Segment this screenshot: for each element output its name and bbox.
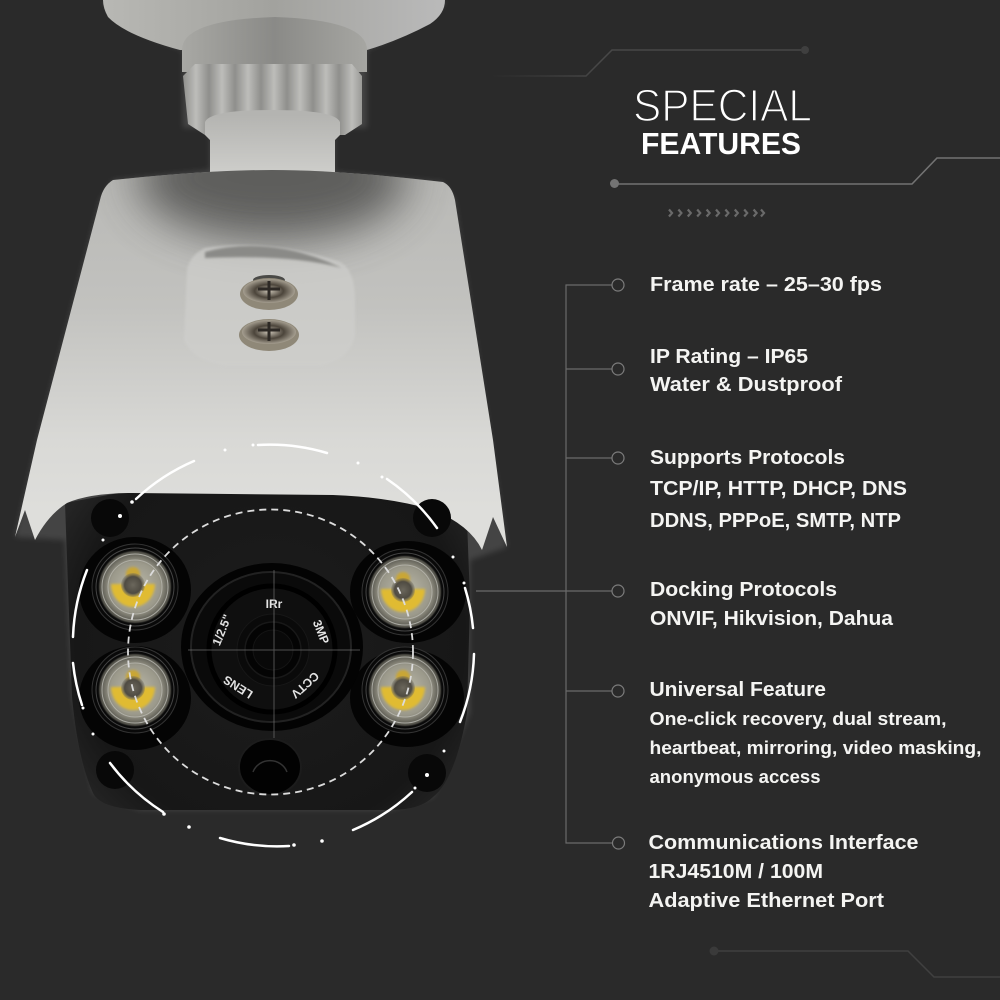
- LED recesses: [79, 537, 466, 750]
- feature: communications: Communications Interface: [648, 832, 918, 854]
- screw recess: [184, 245, 355, 366]
- feature: frame rate: Frame rate – 25–30 fps: [650, 274, 882, 296]
- feature: IP rating: Water & Dustproof: [650, 374, 842, 396]
- corner screw holes: [91, 499, 451, 792]
- feature: docking protocols: Docking Protocols: [650, 579, 837, 601]
- dashed inner ring: [128, 510, 413, 794]
- ceiling mount disc: [103, 0, 445, 50]
- feature: universal: Universal Feature: [650, 679, 826, 701]
- lens markings: [209, 597, 332, 701]
- feature node circles: [612, 279, 624, 849]
- lens markings: CCTV: [288, 669, 322, 701]
- glow around camera: [15, 0, 507, 810]
- bottom sensor hole: [239, 739, 301, 795]
- feature: communications: Adaptive Ethernet Port: [648, 890, 884, 912]
- circuit line: bottom: [710, 946, 1000, 977]
- mounting screws: [239, 275, 299, 351]
- LED lamps: [92, 544, 448, 733]
- camera illustration: [15, 0, 507, 810]
- feature: supports protocols: Supports Protocols: [650, 447, 845, 469]
- circuit line: under title: [610, 158, 1000, 188]
- mount collar: [182, 17, 367, 72]
- chevrons: [669, 210, 764, 216]
- feature: universal: anonymous access: [650, 767, 820, 787]
- feature: universal: One-click recovery, dual stream,: [650, 709, 946, 729]
- feature: docking protocols: [650, 579, 894, 630]
- feature: supports protocols: [650, 447, 907, 532]
- lens markings: 1/2.5": [209, 612, 235, 648]
- feature: communications: 1RJ4510M / 100M: [648, 861, 823, 883]
- title: FEATURES: [641, 126, 801, 161]
- central lens: [181, 563, 363, 731]
- lens markings: 3MP: [310, 618, 332, 646]
- feature: communications: [648, 832, 918, 912]
- knurled nut: [183, 64, 362, 135]
- title: [633, 80, 812, 161]
- circuit line: top: [490, 46, 809, 76]
- segmented outer ring: [73, 445, 474, 846]
- title: SPECIAL: [633, 80, 812, 131]
- lens markings: IRr: [266, 597, 283, 611]
- weather hood: [15, 170, 507, 550]
- neck: [205, 110, 340, 175]
- feature: universal: heartbeat, mirroring, video masking,: [650, 738, 982, 758]
- feature: docking protocols: ONVIF, Hikvision, Dahua: [650, 608, 894, 630]
- feature: supports protocols: TCP/IP, HTTP, DHCP, DNS: [650, 478, 907, 500]
- feature: universal: [650, 679, 982, 787]
- camera front housing: [65, 490, 470, 810]
- feature connector lines: [476, 285, 612, 843]
- feature: supports protocols: DDNS, PPPoE, SMTP, NTP: [650, 510, 901, 532]
- lens markings: LENS: [221, 673, 255, 701]
- feature: IP rating: IP Rating – IP65: [650, 346, 808, 368]
- crosshair: [188, 570, 360, 738]
- ring accent dots: [82, 444, 466, 847]
- feature: IP rating: [650, 346, 842, 396]
